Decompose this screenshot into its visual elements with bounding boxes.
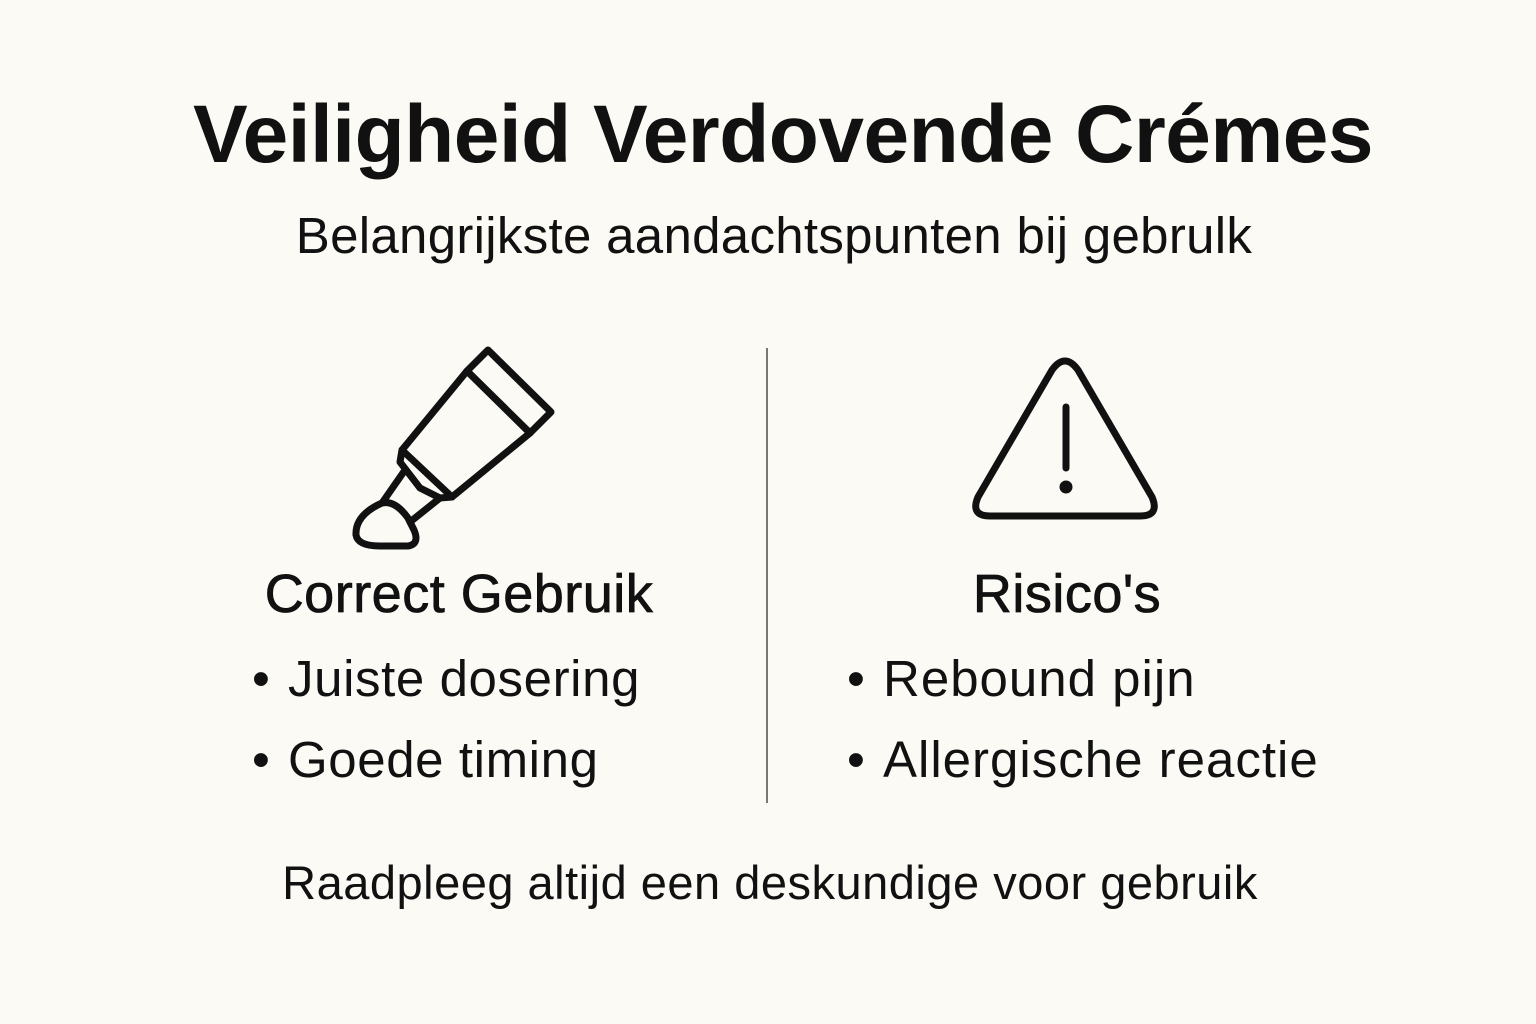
- title: Veiligheid Verdovende Crémes: [193, 89, 1373, 180]
- divider: [766, 348, 768, 803]
- list: correct gebruik: •: [252, 731, 270, 788]
- list: correct gebruik: [252, 650, 640, 788]
- list: correct gebruik: Juiste dosering: [288, 650, 640, 707]
- list: risico's: [847, 650, 1319, 788]
- icon: warning triangle: [972, 358, 1158, 520]
- list: risico's: •: [847, 650, 866, 707]
- heading: risico's: Risico's: [973, 564, 1161, 624]
- icon: cream tube: [352, 346, 554, 550]
- list: correct gebruik: Goede timing: [288, 731, 599, 788]
- heading: correct gebruik: Correct Gebruik: [265, 564, 653, 624]
- subtitle: Belangrijkste aandachtspunten bij gebrulk: [296, 207, 1252, 264]
- list: risico's: Rebound pijn: [883, 650, 1196, 707]
- list: risico's: Allergische reactie: [883, 731, 1319, 788]
- list: risico's: •: [847, 731, 866, 788]
- list: correct gebruik: •: [252, 650, 270, 707]
- footer note: Raadpleeg altijd een deskundige voor gebruik: [282, 856, 1258, 909]
